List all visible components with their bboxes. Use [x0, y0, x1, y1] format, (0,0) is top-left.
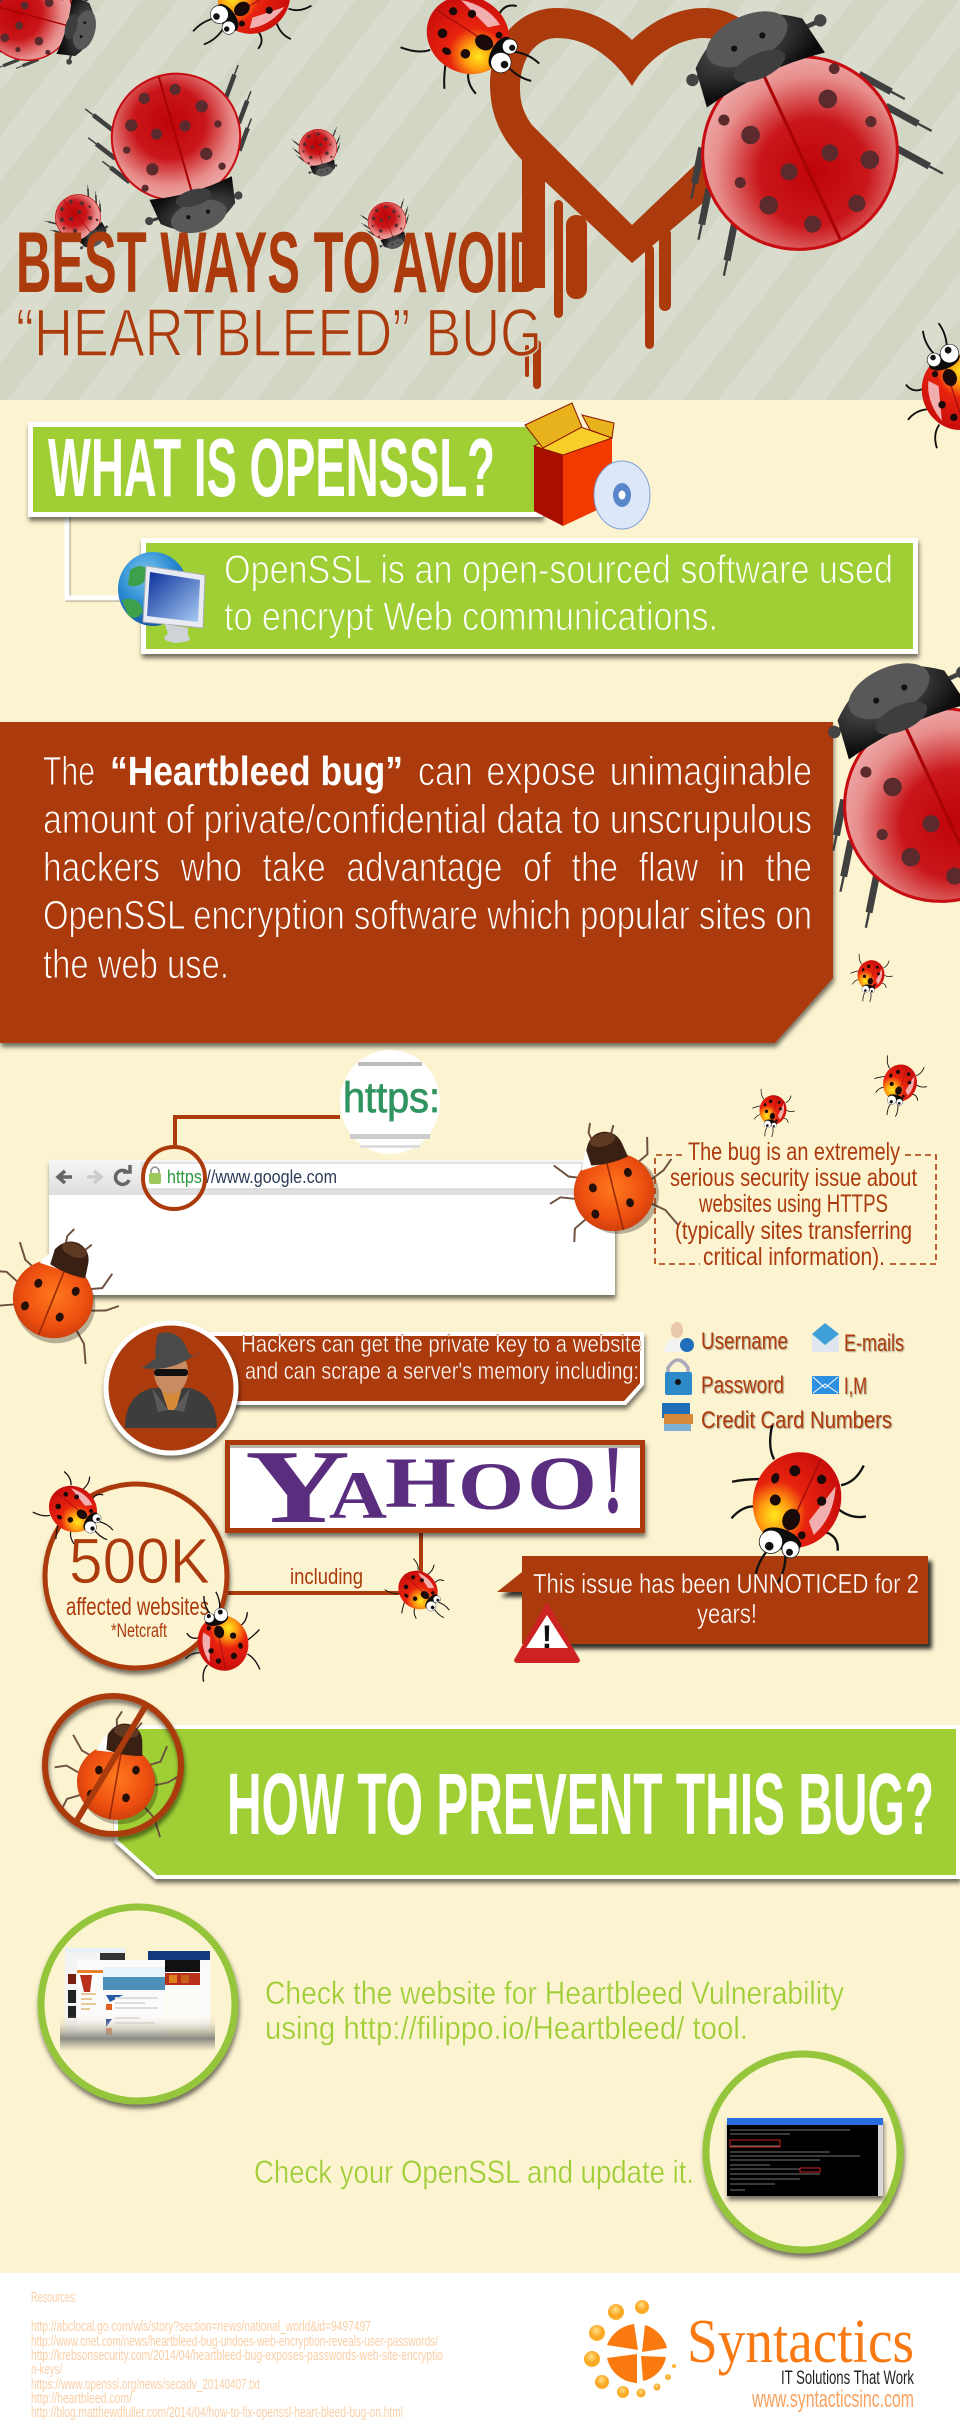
step two circle [706, 2054, 900, 2250]
icon: tiny ladybug [866, 1054, 932, 1123]
icon: ladybug on circle bottom [171, 1583, 269, 1687]
heading: WHAT IS OPENSSL? [48, 421, 495, 514]
icon: email [812, 1323, 839, 1352]
callout text [670, 1138, 917, 1271]
icon: CD disc [594, 461, 650, 529]
resources list: http://krebsonsecurity.com/2014/04/heartbleed-bug-exposes-passwords-web-site-encryptio [31, 2347, 443, 2364]
definition box [144, 540, 916, 652]
panel: how to prevent [45, 1696, 958, 1877]
icon: bleeding heart [490, 8, 777, 389]
icon: big ladybug right [763, 616, 960, 946]
callout text: years! [697, 1598, 757, 1629]
Yahoo logo: H [385, 1443, 456, 1523]
icon: big ladybug on heart [621, 0, 957, 294]
callout text: critical information). [703, 1243, 885, 1271]
logo wordmark: Syntactics [687, 2308, 914, 2376]
icon: tiny ladybug [748, 1088, 798, 1141]
resources list: http://www.cnet.com/news/heartbleed-bug-undoes-web-encryption-reveals-user-passwords/ [31, 2333, 439, 2350]
https magnified text: https: [343, 1074, 440, 1122]
green banner [116, 1727, 958, 1877]
icon: globe and monitor [118, 552, 205, 643]
url text: https://www.google.com [167, 1167, 337, 1187]
callout: dashed box [655, 1138, 936, 1271]
icon: ladybug on connector [380, 1551, 466, 1636]
icon: big ladybug [703, 1419, 884, 1608]
500K number: 500K [69, 1525, 210, 1597]
icon: ladybug right edge [879, 306, 960, 458]
title line one: BEST WAYS TO AVOID [16, 215, 544, 311]
callout text: websites using HTTPS [698, 1190, 888, 1218]
icon: blue mail [812, 1376, 839, 1394]
step one text [265, 1975, 844, 2046]
icon: warning triangle: ! [542, 1619, 552, 1655]
explanation text: hackers who take advantage of the flaw in the [43, 844, 812, 890]
connector line [67, 512, 130, 598]
terminal screenshot [727, 2118, 883, 2196]
panel: https browser [0, 1050, 936, 1367]
panel: header [0, 0, 960, 458]
resources list: http://heartbleed.com/ [31, 2390, 133, 2407]
icon: open package [525, 403, 614, 526]
emails label: E-mails [844, 1330, 904, 1357]
icon: tiny ladybug [846, 953, 896, 1006]
highlight circle [143, 1147, 205, 1209]
magnified https bubble [340, 1050, 440, 1154]
browser toolbar [49, 1160, 615, 1195]
icon: user [664, 1322, 694, 1352]
website screenshots [60, 1948, 215, 2051]
explanation text: “Heartbleed bug” [110, 748, 403, 794]
icon: tiny ladybug [289, 124, 350, 182]
panel: what is OpenSSL [30, 403, 916, 652]
panel: footer [0, 2273, 960, 2434]
Netcraft source: *Netcraft [111, 1621, 168, 1642]
resources list: http://abclocal.go.com/wls/story?section=news/national_world&id=9497497 [31, 2318, 371, 2335]
footer background [0, 2273, 960, 2434]
IM label: I,M [844, 1373, 867, 1400]
banner text [241, 1331, 642, 1385]
resources list: http://blog.matthewdfuller.com/2014/04/how-to-fix-openssl-heart-bleed-bug-on.html [31, 2404, 403, 2421]
explanation text: can expose unimaginable [418, 748, 812, 794]
resources list: https://www.openssl.org/news/secadv_20140407.txt [31, 2376, 261, 2393]
icon: no bugs sign [45, 1696, 189, 1839]
password label: Password [701, 1372, 784, 1399]
Yahoo logo: Y [245, 1428, 350, 1545]
definition text [224, 548, 893, 639]
callout text: (typically sites transferring [675, 1217, 912, 1245]
Yahoo logo: O [458, 1448, 524, 1524]
banner text: Hackers can get the private key to a website [241, 1331, 642, 1358]
Yahoo logo: A [329, 1457, 387, 1533]
icon: credit cards [662, 1403, 693, 1431]
explanation text [43, 748, 812, 987]
icon: tiny ladybug by title [41, 181, 123, 263]
icon: tiny ladybug above title [357, 195, 420, 257]
resources list: Resources: [31, 2289, 77, 2306]
icon: ladybug on circle top [28, 1462, 131, 1563]
icon: warning triangle [514, 1602, 580, 1663]
title line two: “HEARTBLEED” BUG [16, 295, 542, 371]
definition text: to encrypt Web communications. [224, 595, 718, 639]
logo mark [584, 2300, 676, 2398]
icon: orange ladybug right [533, 1106, 687, 1254]
panel: prevention steps [41, 1907, 900, 2250]
data list [662, 1322, 904, 1434]
icon: ladybug left [77, 53, 284, 254]
explanation text: the web use. [43, 941, 229, 987]
panel: unnoticed callout [497, 1419, 928, 1663]
resources list [31, 2289, 443, 2421]
heading box [30, 421, 540, 514]
banner text: and can scrape a server's memory including: [245, 1358, 639, 1385]
connector line [175, 1117, 340, 1147]
address bar [142, 1163, 582, 1189]
browser nav buttons [58, 1165, 130, 1184]
header striped background [0, 0, 960, 400]
panel: 500K affected websites [28, 1426, 642, 1687]
icon: ladybug top centre [168, 0, 323, 82]
resources list: n-keys/ [31, 2361, 63, 2378]
step one text: using http://filippo.io/Heartbleed/ tool. [265, 2010, 748, 2046]
banner [200, 1334, 642, 1403]
panel: Heartbleed bug explanation [0, 616, 960, 1043]
Yahoo logo: O [527, 1442, 597, 1526]
icon: ladybug top left [0, 0, 110, 91]
500K circle [45, 1484, 227, 1668]
browser window [49, 1160, 615, 1295]
hacker portrait [106, 1323, 236, 1453]
callout text: The bug is an extremely [688, 1138, 900, 1166]
credit card label: Credit Card Numbers [701, 1407, 892, 1434]
Yahoo logo [245, 1426, 623, 1545]
icon: orange ladybug left [0, 1207, 139, 1367]
step two text: Check your OpenSSL and update it. [254, 2154, 694, 2190]
explanation text: The [43, 748, 95, 794]
Yahoo box [228, 1426, 642, 1545]
panel: hackers [106, 1322, 904, 1453]
padlock [149, 1167, 161, 1184]
step one text: Check the website for Heartbleed Vulnerability [265, 1975, 844, 2011]
affected websites: affected websites [66, 1593, 209, 1621]
callout text [533, 1568, 919, 1629]
connector line [228, 1530, 421, 1593]
Yahoo logo: ! [603, 1426, 623, 1533]
username label: Username [701, 1328, 788, 1355]
explanation text: amount of private/confidential data to unscrupulous [43, 796, 812, 842]
icon: padlock [665, 1360, 692, 1395]
callout box with tail [497, 1556, 928, 1644]
including label: including [290, 1564, 363, 1589]
brown box with cut corner [0, 722, 833, 1043]
icon: ladybug on heart [393, 0, 565, 124]
step one circle [41, 1907, 235, 2101]
